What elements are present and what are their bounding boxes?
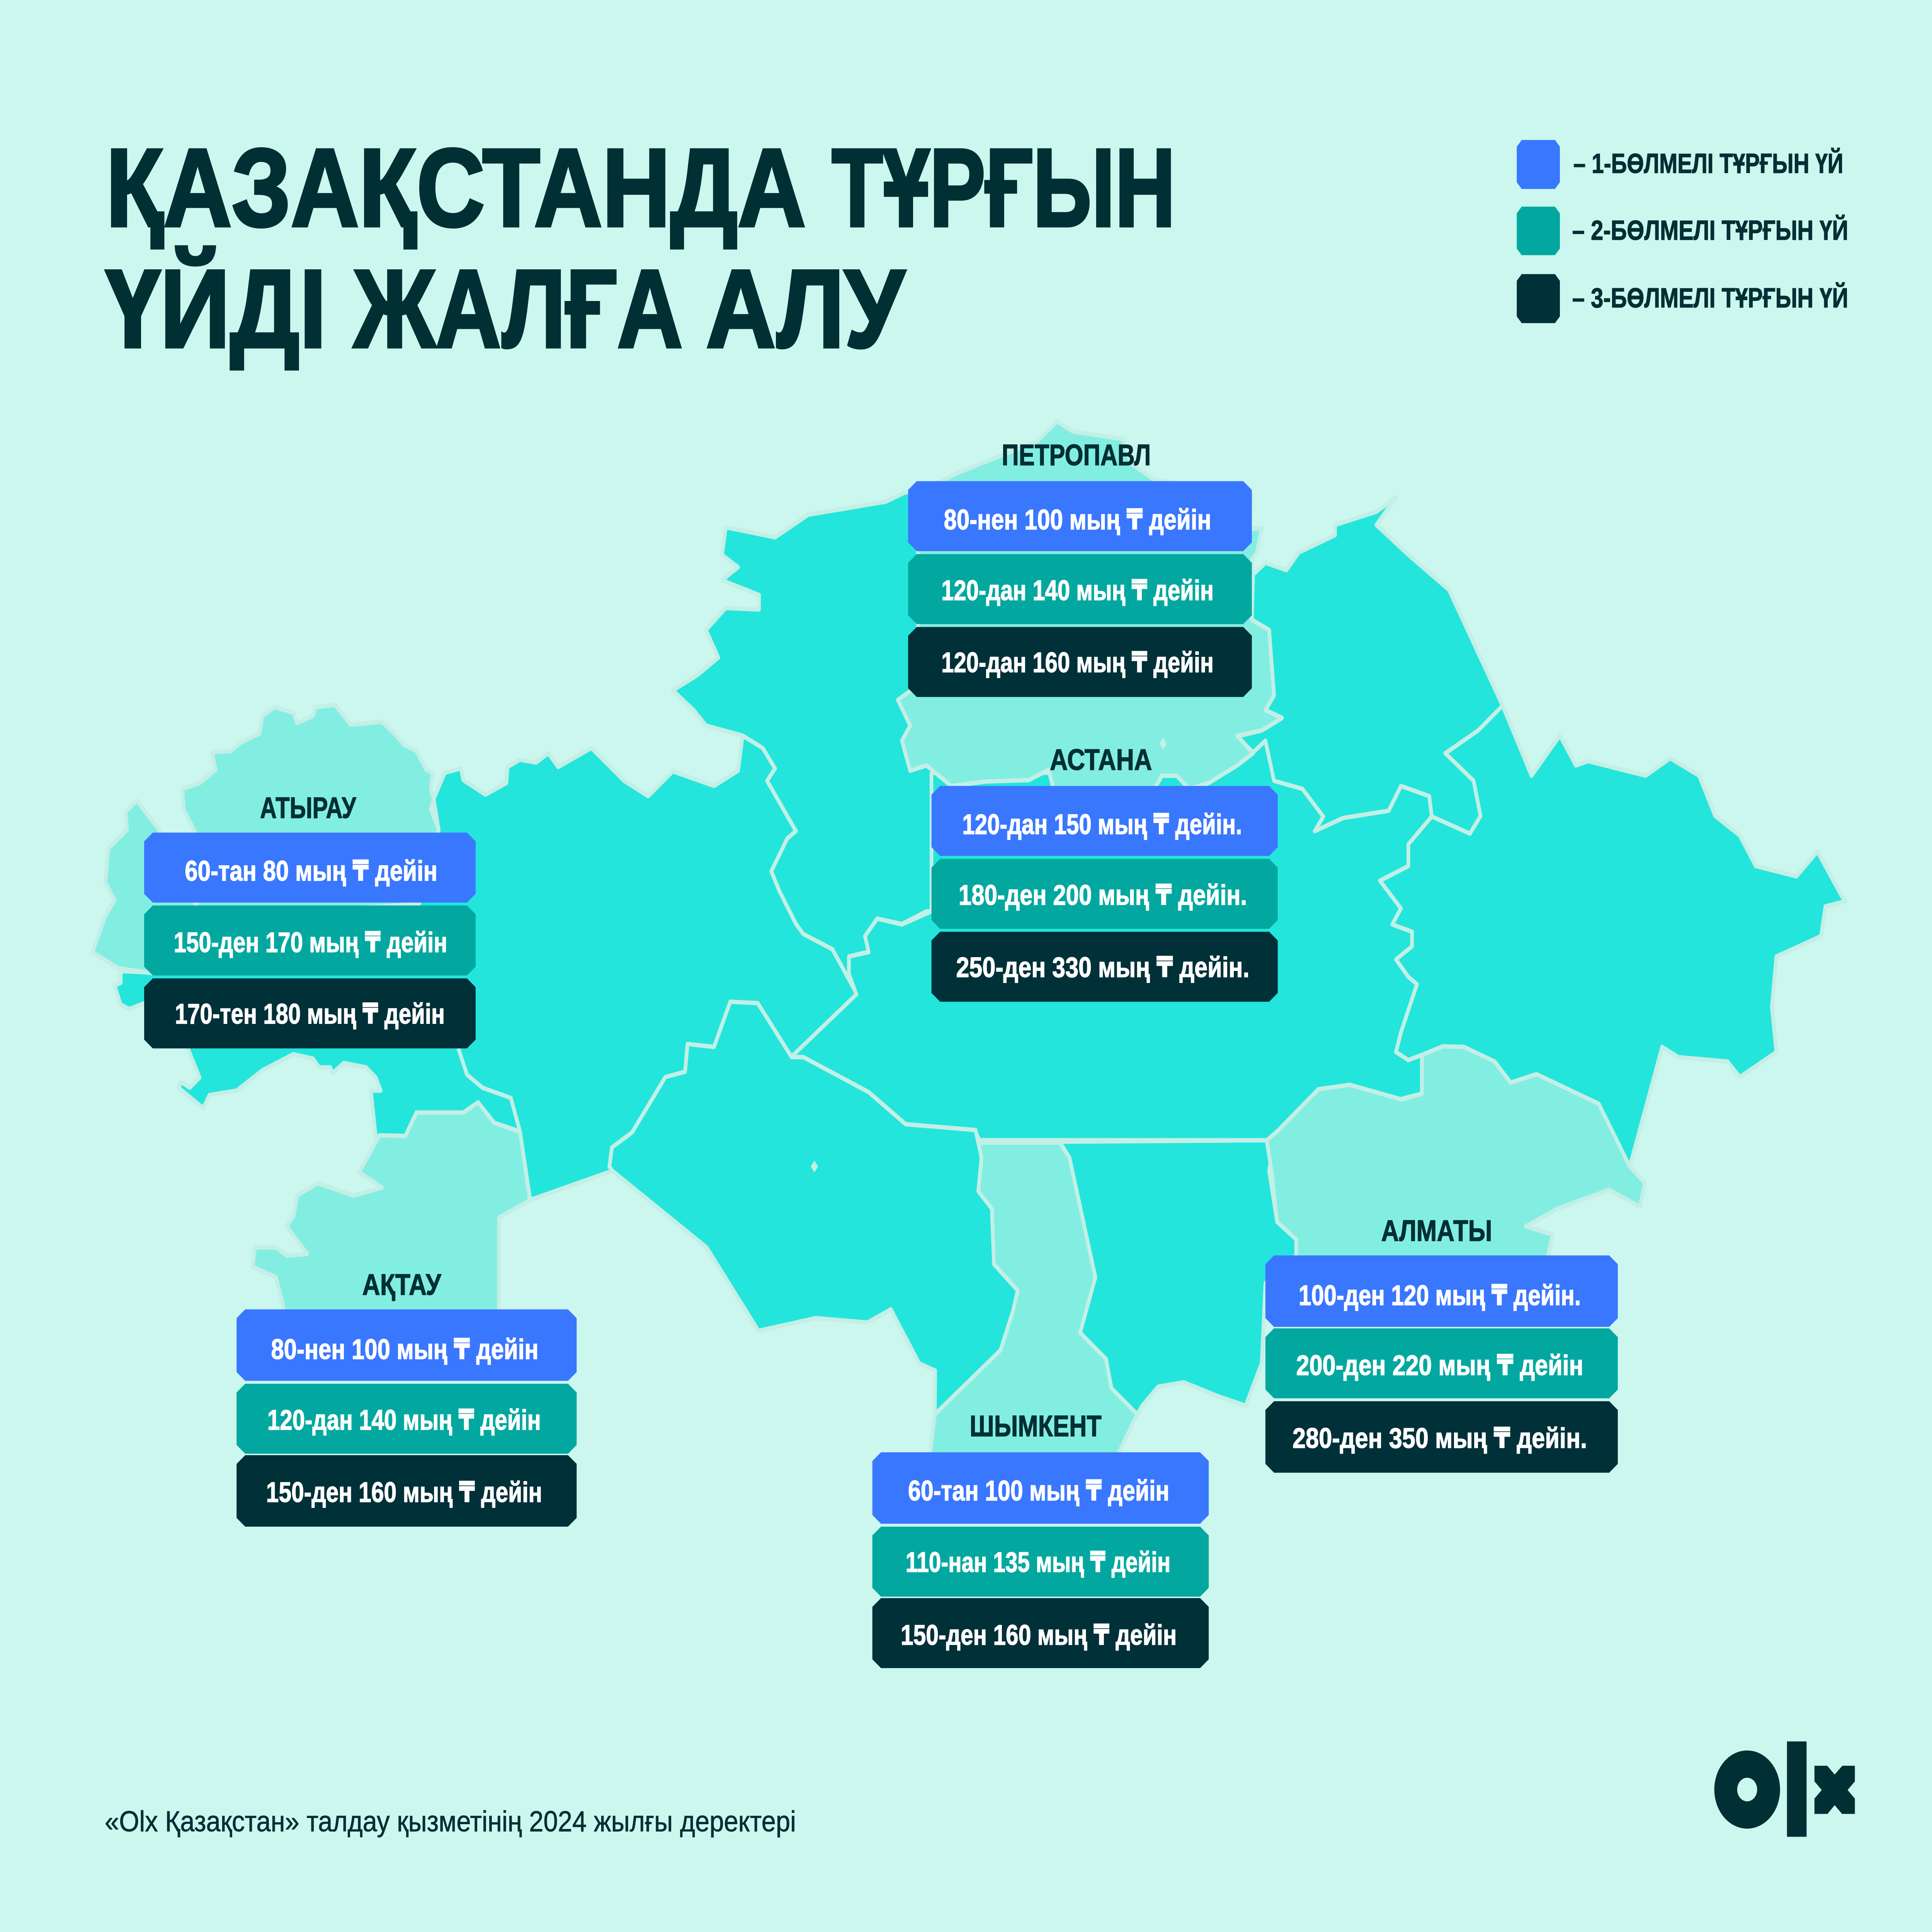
- title: [106, 126, 1175, 371]
- legend item: 3-room: – 3-БӨЛМЕЛІ ТҰРҒЫН ҮЙ: [1572, 282, 1848, 314]
- price: 1-room: [144, 833, 476, 903]
- logo: OLX: [1714, 1742, 1855, 1837]
- price: 1-room: 60-тан 100 мың ₸ дейін: [908, 1475, 1169, 1507]
- price: 2-room: [932, 859, 1278, 929]
- price: 3-room: 280-ден 350 мың ₸ дейін.: [1293, 1422, 1587, 1454]
- price: 1-room: 80-нен 100 мың ₸ дейін: [271, 1333, 538, 1365]
- legend item: 2-room: [1517, 207, 1848, 255]
- price: 3-room: [1265, 1401, 1618, 1473]
- price: 3-room: 150-ден 160 мың ₸ дейін: [901, 1619, 1177, 1651]
- price: 3-room: [236, 1455, 577, 1527]
- price: 3-room: 250-ден 330 мың ₸ дейін.: [956, 951, 1249, 983]
- price: 2-room: [872, 1527, 1209, 1597]
- legend item: 1-room: [1517, 140, 1843, 189]
- region: Petropavl and Astana highlighted: [898, 422, 1282, 789]
- price: 2-room: 120-дан 140 мың ₸ дейін: [267, 1404, 541, 1436]
- price: 2-room: 120-дан 140 мың ₸ дейін: [941, 575, 1214, 606]
- price: 1-room: [932, 786, 1278, 856]
- legend item: 3-room: [1517, 274, 1848, 323]
- region: west: [115, 736, 857, 1200]
- region: south: [1060, 1140, 1296, 1414]
- price: 3-room: [908, 627, 1252, 697]
- region: east: [1380, 706, 1846, 1167]
- region: central: [791, 741, 1432, 1140]
- panel: Petropavl: [908, 439, 1252, 697]
- price: 1-room: [1265, 1255, 1618, 1327]
- price: 1-room: 120-дан 150 мың ₸ дейін.: [962, 809, 1242, 840]
- title: ҮЙДІ: [106, 247, 327, 371]
- price: 3-room: 120-дан 160 мың ₸ дейін: [941, 647, 1214, 679]
- city label: ПЕТРОПАВЛ: [1002, 439, 1151, 472]
- map of Kazakhstan: [92, 422, 1846, 1458]
- title: ҚАЗАҚСТАНДА: [106, 126, 806, 250]
- legend item: 2-room: – 2-БӨЛМЕЛІ ТҰРҒЫН ҮЙ: [1572, 214, 1848, 246]
- legend: [1517, 140, 1848, 323]
- price: 3-room: [932, 932, 1278, 1002]
- source note: «Olx Қазақстан» талдау қызметінің 2024 жылғы деректері: [105, 1805, 796, 1838]
- price: 3-room: [872, 1598, 1209, 1668]
- region: north-west: [673, 492, 936, 995]
- lake: [811, 1161, 818, 1172]
- title: АЛУ: [706, 247, 906, 371]
- lake in Astana region: [1160, 738, 1167, 750]
- price: 1-room: [908, 481, 1252, 551]
- price: 2-room: [236, 1384, 577, 1454]
- price: 2-room: [144, 905, 476, 976]
- price: 1-room: 100-ден 120 мың ₸ дейін.: [1299, 1279, 1581, 1311]
- price: 1-room: [872, 1452, 1209, 1524]
- region: Almaty highlighted: [1267, 1046, 1645, 1261]
- panel: Atyrau: [144, 791, 476, 1048]
- price: 3-room: 150-ден 160 мың ₸ дейін: [266, 1476, 542, 1508]
- region: north-east: [1237, 497, 1503, 833]
- city label: ШЫМКЕНТ: [970, 1410, 1102, 1443]
- legend item: 1-room: – 1-БӨЛМЕЛІ ТҰРҒЫН ҮЙ: [1573, 148, 1843, 179]
- region: Atyrau western lobe: [92, 801, 209, 973]
- price: 2-room: 150-ден 170 мың ₸ дейін: [174, 927, 447, 958]
- city label: АЛМАТЫ: [1381, 1214, 1492, 1248]
- panel: Almaty: [1265, 1214, 1618, 1473]
- price: 2-room: 110-нан 135 мың ₸ дейін: [906, 1546, 1170, 1578]
- panel: Astana: [932, 743, 1278, 1002]
- price: 3-room: [144, 978, 476, 1048]
- region: Shymkent highlighted: [930, 1143, 1137, 1458]
- title: ЖАЛҒА: [352, 247, 683, 371]
- price: 2-room: [1265, 1328, 1618, 1398]
- price: 3-room: 170-тен 180 мың ₸ дейін: [175, 998, 445, 1030]
- price: 1-room: 60-тан 80 мың ₸ дейін: [185, 855, 437, 887]
- panel: Shymkent: [872, 1410, 1209, 1668]
- city label: АҚТАУ: [362, 1268, 442, 1301]
- region: south-central: [609, 1002, 1018, 1414]
- city label: АТЫРАУ: [260, 791, 357, 825]
- region: Aktau highlighted: [253, 1102, 530, 1320]
- region: Atyrau highlighted: [182, 705, 439, 918]
- price: 2-room: 180-ден 200 мың ₸ дейін.: [959, 879, 1247, 911]
- price: 1-room: 80-нен 100 мың ₸ дейін: [944, 504, 1211, 536]
- title: ТҰРҒЫН: [832, 126, 1175, 250]
- panel: Aktau: [236, 1268, 577, 1527]
- city label: АСТАНА: [1050, 743, 1152, 777]
- price: 2-room: [908, 554, 1252, 624]
- price: 1-room: [236, 1310, 577, 1381]
- price: 2-room: 200-ден 220 мың ₸ дейін: [1296, 1350, 1583, 1381]
